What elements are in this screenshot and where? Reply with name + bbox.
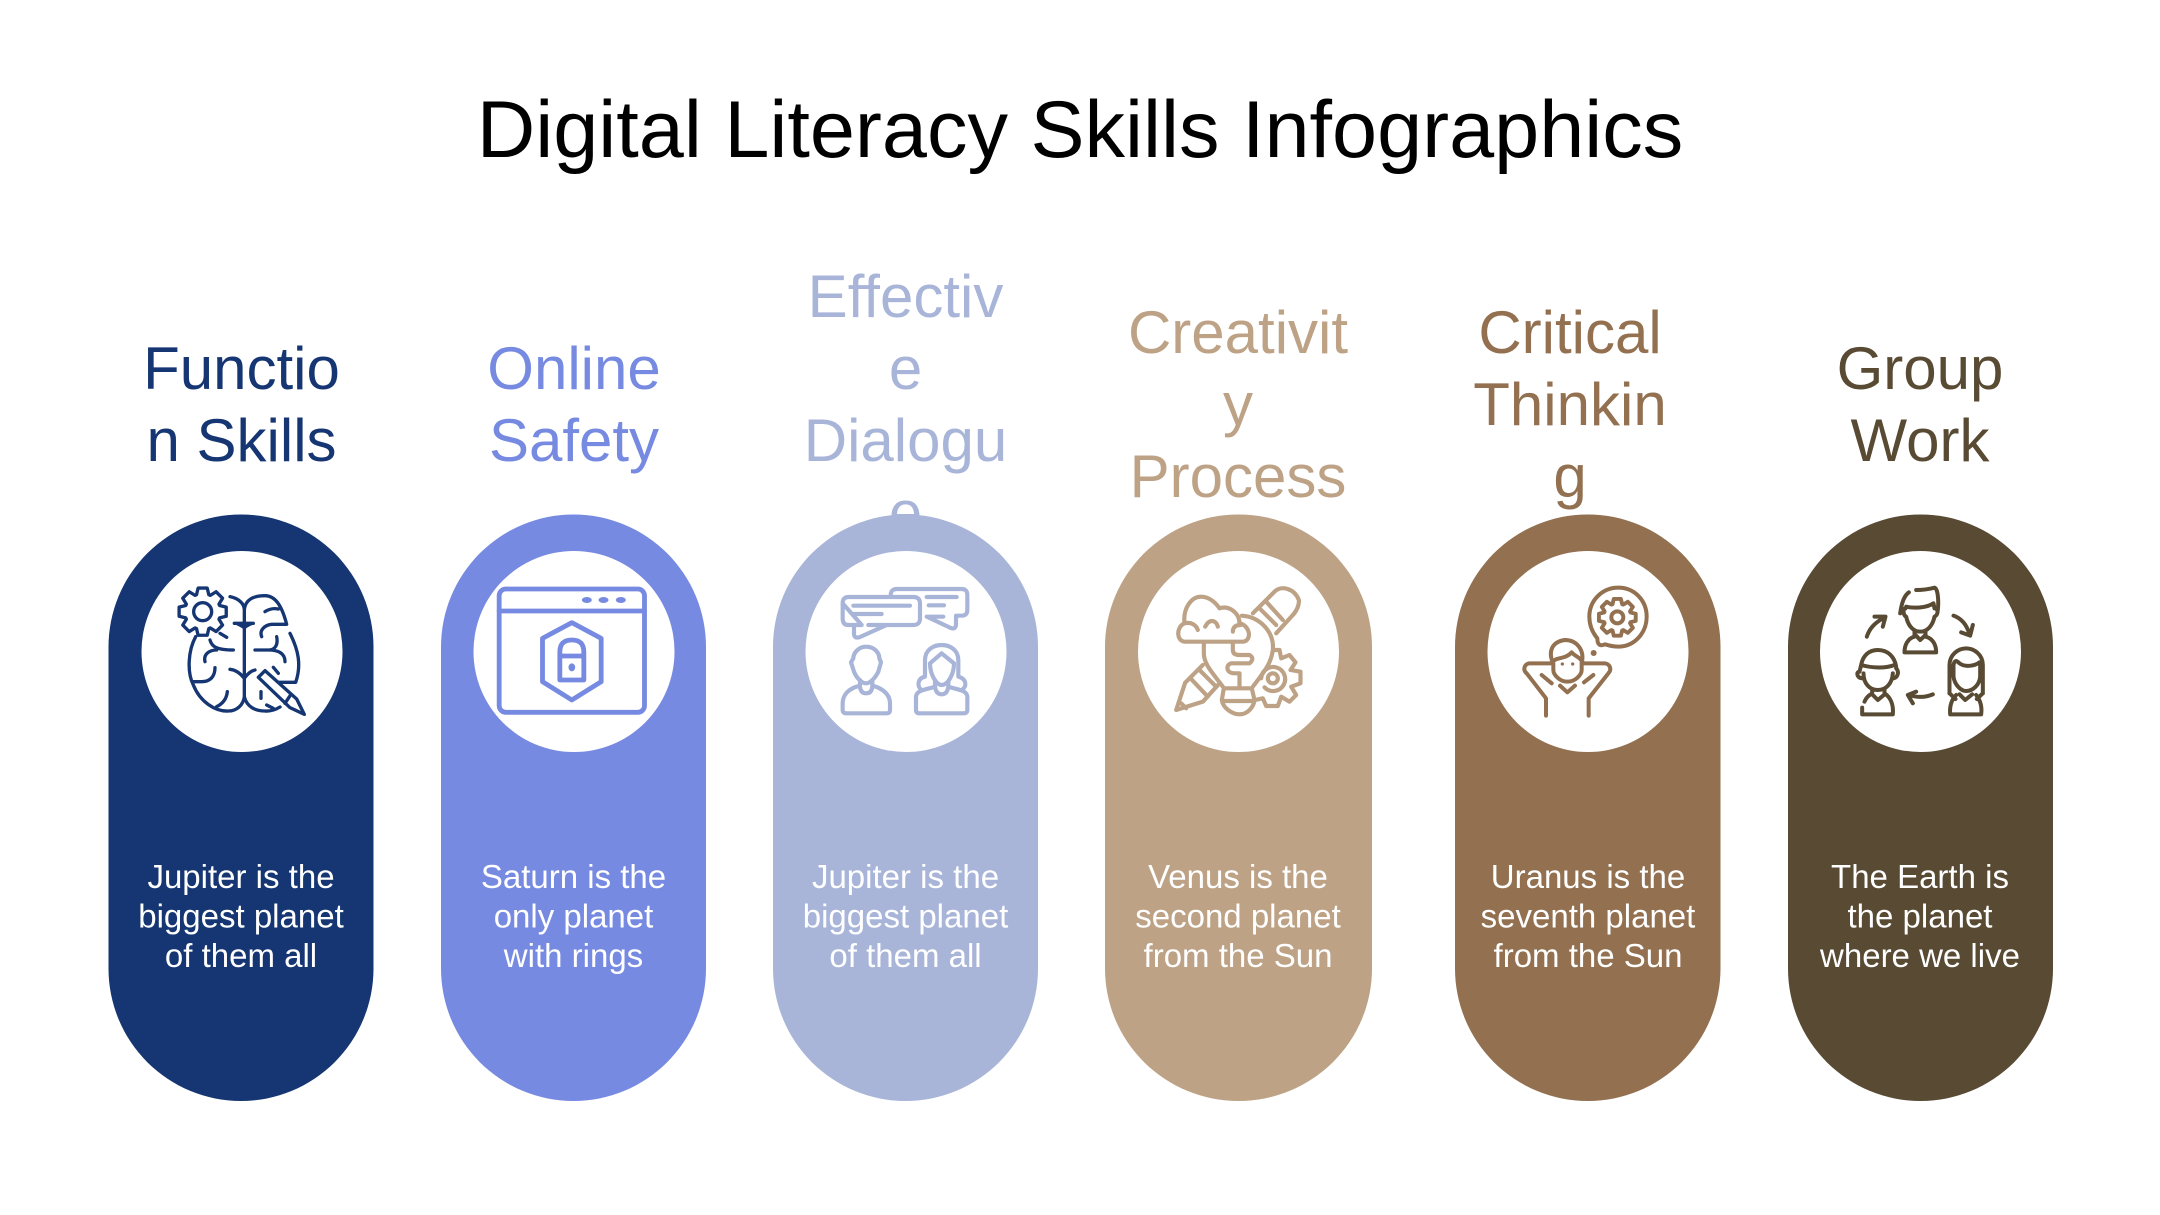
icon: three people with cycle arrows (1857, 588, 1983, 714)
description: second planet (1135, 898, 1341, 934)
pill (441, 514, 706, 1101)
icon circle (806, 551, 1006, 752)
pill (1105, 514, 1372, 1101)
description: The Earth is (1831, 858, 2009, 895)
description: Jupiter is the (812, 858, 999, 895)
icon circle (1138, 551, 1339, 752)
description: from the Sun (1144, 937, 1332, 974)
heading: Group Work: Group (1837, 335, 2003, 402)
description: with rings (503, 937, 643, 974)
icon: browser window with shield lock (499, 589, 644, 712)
heading: Function Skills: n Skills (146, 407, 337, 474)
icon: two people in dialogue (843, 589, 967, 713)
heading: Online Safety: Safety (489, 407, 659, 474)
description: of them all (165, 937, 317, 974)
description: Jupiter is the (147, 858, 335, 895)
description: only planet (494, 898, 653, 934)
pill (1788, 514, 2053, 1101)
icon: lightbulb, cloud, pencil and gear (1176, 588, 1300, 714)
description: of them all (829, 937, 982, 974)
pill (1455, 514, 1720, 1101)
description: seventh planet (1481, 898, 1695, 934)
icon circle (1820, 551, 2021, 752)
description: biggest planet (138, 898, 344, 934)
heading: Effective Dialogue: Dialogu (804, 407, 1007, 474)
panel: Group Work (1788, 335, 2053, 1101)
heading: Critical Thinking: g (1553, 443, 1587, 510)
panel: Critical Thinking (1455, 299, 1720, 1101)
pill (108, 514, 374, 1101)
heading: Creativity Process: y (1223, 371, 1253, 438)
panel: Effective Dialogue (773, 263, 1038, 1101)
icon: brain with gear and pencil (179, 588, 304, 714)
icon circle (1488, 551, 1688, 752)
heading: Effective Dialogue: e (889, 335, 922, 402)
heading: Effective Dialogue: Effectiv (808, 263, 1003, 330)
panel: Creativity Process (1105, 299, 1372, 1101)
description: from the Sun (1494, 937, 1682, 974)
icon circle (142, 551, 342, 752)
icon circle (474, 551, 674, 752)
pill (773, 514, 1038, 1101)
panel: Function Skills (108, 335, 374, 1101)
heading: Function Skills: Functio (143, 335, 340, 402)
icon: person thinking with gear bubble (1524, 588, 1647, 716)
description: where we live (1819, 937, 2020, 974)
heading: Effective Dialogue: e (889, 479, 922, 546)
heading: Critical Thinking: Thinkin (1473, 371, 1667, 438)
heading: Creativity Process: Process (1130, 443, 1346, 510)
description: Uranus is the (1491, 858, 1685, 895)
heading: Critical Thinking: Critical (1478, 299, 1662, 366)
description: Saturn is the (481, 858, 666, 895)
panel: Online Safety (441, 335, 706, 1101)
heading: Online Safety: Online (487, 335, 661, 402)
heading: Creativity Process: Creativit (1128, 299, 1348, 366)
title: Digital Literacy Skills Infographics (477, 85, 1683, 175)
description: the planet (1848, 898, 1992, 934)
description: biggest planet (803, 898, 1008, 934)
heading: Group Work: Work (1851, 407, 1990, 474)
description: Venus is the (1148, 858, 1328, 895)
